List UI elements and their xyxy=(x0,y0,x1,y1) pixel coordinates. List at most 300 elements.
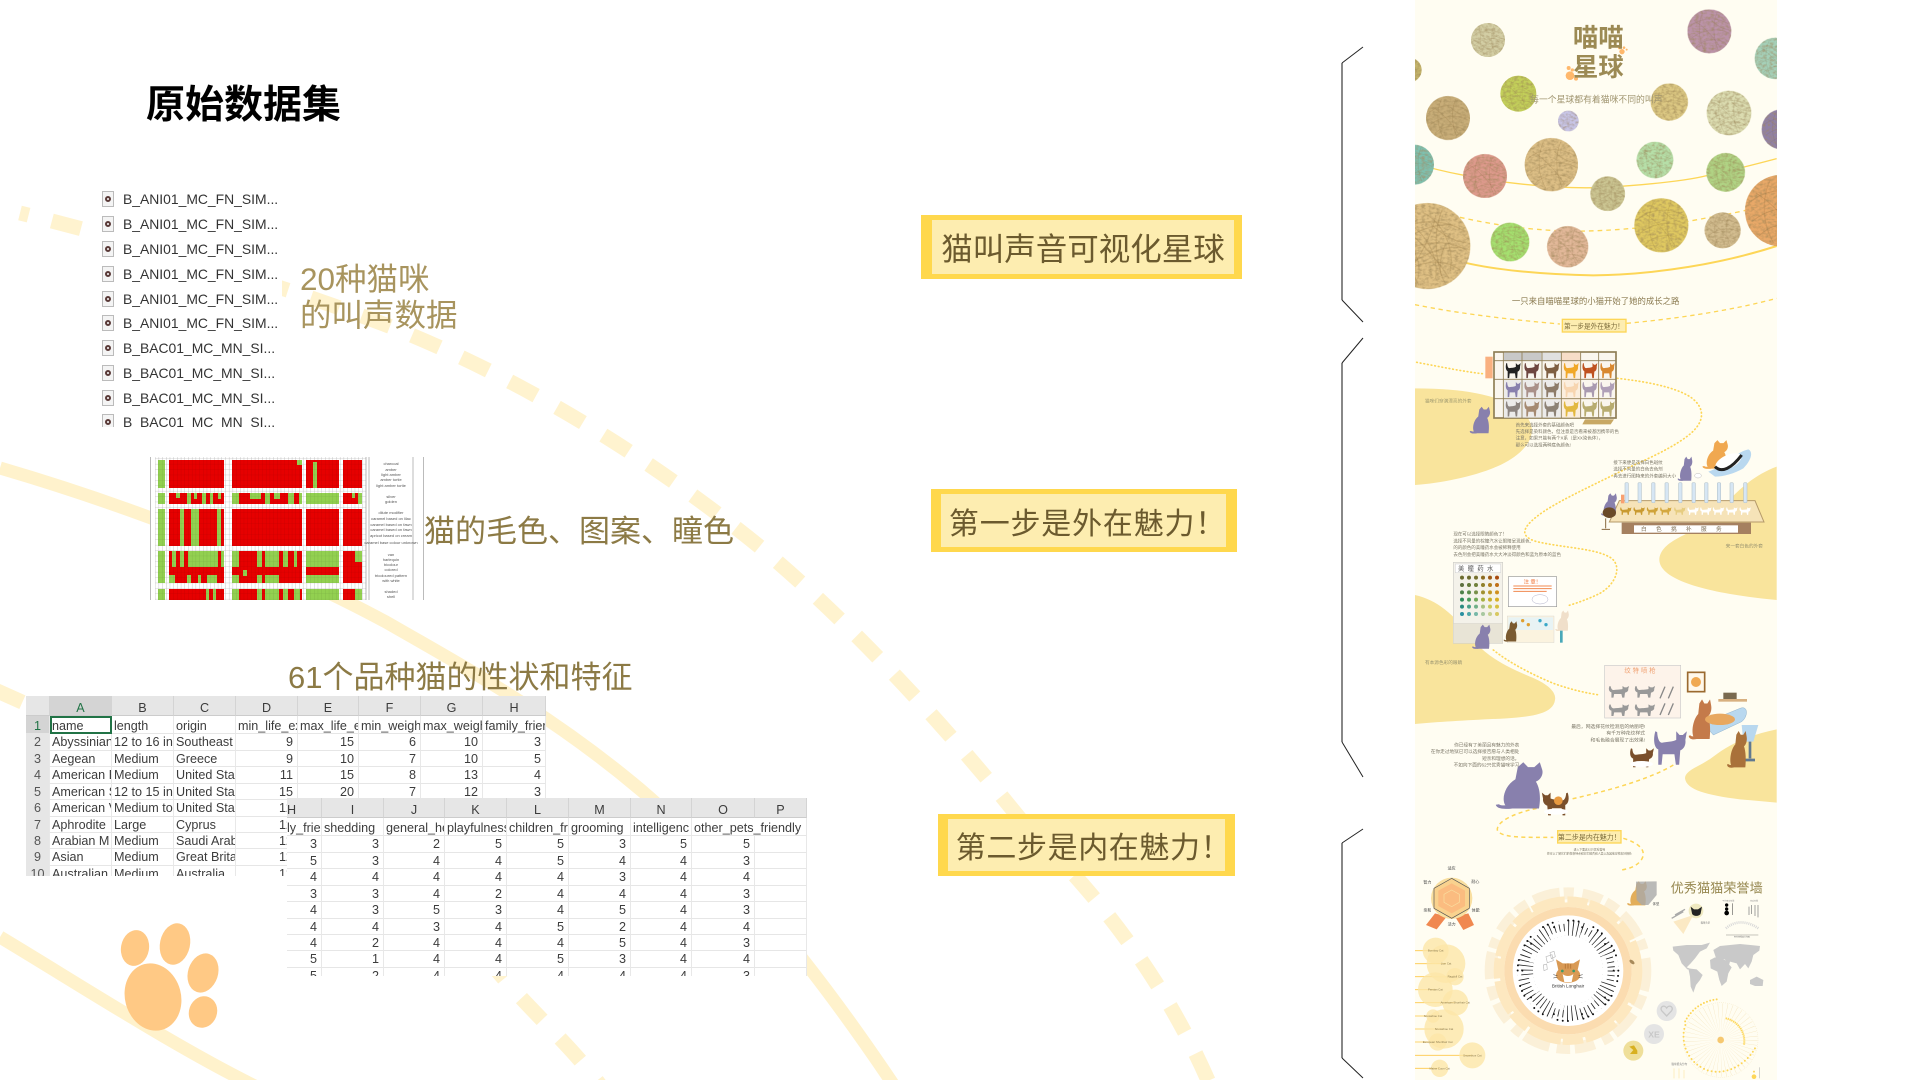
spreadsheet: cat traits columns H to P: 4 xyxy=(680,920,687,934)
heading: 优秀猫猫荣誉墙: 优秀猫猫荣誉墙 xyxy=(1671,880,1763,895)
callout: 第二步是内在魅力: 第二步是内在魅力！ xyxy=(956,832,1231,865)
spreadsheet: cat traits columns H to P: 5 xyxy=(680,837,687,851)
text block: finally choose a pattern: 最后，网选择花纹检测后的纳丽吧! xyxy=(1571,723,1645,730)
callout: 第一步是外在魅力: 第一步是外在魅力！ xyxy=(949,508,1226,540)
spreadsheet: cat traits columns H to P: N xyxy=(656,803,666,817)
callout: 第二步是内在魅力: 第二步是内在魅力！ xyxy=(1558,832,1621,841)
text block: finally choose a pattern: 有千万种花纹样式 xyxy=(1606,730,1645,737)
heatmap: coat colour, pattern and eye colour table: apricot based on cream xyxy=(370,533,413,538)
section: yarn ball planets xyxy=(1384,9,1816,306)
text block: choose base colour: 先选择是染料颜色，但注意是否看来被基因携带的色 xyxy=(1516,428,1619,435)
text block: choose base colour: 首先来选择外套的基础颜色吧 xyxy=(1516,421,1574,428)
chart: radar with ribbon xyxy=(1423,865,1480,930)
spreadsheet: cat traits columns H to P: 4 xyxy=(372,870,379,884)
heatmap: coat colour, pattern and eye colour table: charcoal xyxy=(383,461,399,466)
heatmap: coat colour, pattern and eye colour table: light amber xyxy=(381,472,402,477)
spreadsheet: cat traits columns H to P: 3 xyxy=(619,952,626,966)
spreadsheet: cat traits columns A to H: Medium xyxy=(114,834,159,848)
icon: salon chairs with cats xyxy=(1689,699,1758,768)
yarn ball xyxy=(1745,175,1816,246)
icon: sound wave cards xyxy=(1543,951,1555,971)
text block: choose eye colour: 选择不同量的棕瞳汽水让眼睛呈现颜色, xyxy=(1453,537,1531,544)
spreadsheet: cat traits columns H to P: 5 xyxy=(433,903,440,917)
spreadsheet: cat traits columns A to H xyxy=(26,696,546,876)
spreadsheet: cat traits columns A to H: 12 to 15 in xyxy=(114,785,173,799)
yarn ball xyxy=(1547,226,1588,267)
spreadsheet: cat traits columns A to H: United Sta xyxy=(176,785,235,799)
spreadsheet: cat traits columns H to P: 3 xyxy=(372,837,379,851)
spreadsheet: cat traits columns A to H: 12 xyxy=(279,801,293,815)
spreadsheet: cat traits columns H to P: 4 xyxy=(433,936,440,950)
label: 20种猫咪的叫声数据 xyxy=(300,261,458,333)
spreadsheet: cat traits columns A to H: 15 xyxy=(340,735,354,749)
spreadsheet: cat traits columns H to P: M xyxy=(594,803,605,817)
heatmap: coat colour, pattern and eye colour table: colored xyxy=(384,567,398,572)
heatmap: coat colour, pattern and eye colour table: amber xyxy=(385,467,397,472)
icon: cat size comparison xyxy=(1627,881,1660,906)
spreadsheet: cat traits columns H to P: O xyxy=(718,803,728,817)
heatmap: coat colour, pattern and eye colour table: silver xyxy=(386,494,396,499)
spreadsheet: cat traits columns H to P: 4 xyxy=(433,870,440,884)
spreadsheet: cat traits columns H to P: 4 xyxy=(743,920,750,934)
dashed journey path xyxy=(1497,765,1673,870)
chart: coat colour cat shelf xyxy=(1485,352,1616,424)
spreadsheet: cat traits columns H to P: 4 xyxy=(680,952,687,966)
file list: cat sound recordings xyxy=(102,188,282,427)
chart: radar with ribbon: 体能 xyxy=(1472,906,1480,912)
chart: radar with ribbon: 智力 xyxy=(1423,878,1431,884)
spreadsheet: cat traits columns H to P: intelligenc xyxy=(633,821,689,835)
icon: attention whiteboard xyxy=(1508,577,1557,607)
yarn ball xyxy=(1525,138,1578,191)
chart: test tubes white spotting xyxy=(1609,483,1764,534)
chart: cat head fan xyxy=(1672,904,1711,934)
label: 20种猫咪的叫声数据: 20种猫咪 xyxy=(300,261,430,297)
spreadsheet: cat traits columns H to P: 4 xyxy=(680,854,687,868)
spreadsheet: cat traits columns A to H: Greece xyxy=(176,752,217,766)
spreadsheet: cat traits columns H to P: 5 xyxy=(495,837,502,851)
label: British Longhair: British Longhair xyxy=(1552,984,1585,989)
chart: small bar legend: 猫咪祖先分布 xyxy=(1671,1062,1688,1066)
heatmap: coat colour, pattern and eye colour table: dilute modifier xyxy=(379,510,404,515)
spreadsheet: cat traits columns A to H: A xyxy=(76,701,85,715)
spreadsheet: cat traits columns A to H: C xyxy=(200,701,209,715)
spreadsheet: cat traits columns A to H: 20 xyxy=(340,785,354,799)
chart: breed bubbles: Snowshoe Cat xyxy=(1435,1027,1453,1031)
spreadsheet: cat traits columns A to H: family_frier xyxy=(485,719,546,733)
yarn ball xyxy=(1706,153,1745,192)
text block: small intro: 你可以了解它们的性格特点和它们能否和人类以及其他宠物友好相处 xyxy=(1547,852,1632,856)
text block: choose base colour: 注意，如果只能有两个X系（是XX染色体）， xyxy=(1516,435,1603,442)
heatmap: coat colour, pattern and eye colour table: shell xyxy=(387,594,395,599)
spreadsheet: cat traits columns A to H: 5 xyxy=(534,752,541,766)
yarn ball xyxy=(1397,58,1422,82)
spreadsheet: cat traits columns A to H: 8 xyxy=(34,834,41,848)
spreadsheet: cat traits columns H to P: 3 xyxy=(372,887,379,901)
spreadsheet: cat traits columns H to P: 4 xyxy=(495,952,502,966)
spreadsheet: cat traits columns A to H: 13 xyxy=(464,768,478,782)
spreadsheet: cat traits columns A to H: 6 xyxy=(34,801,41,815)
spreadsheet: cat traits columns H to P: 4 xyxy=(557,936,564,950)
text block: choose eye colour: 去色剂会把美瞳药水大大冲淡得颜色和蓝为原本的蓝色 xyxy=(1453,551,1561,558)
spreadsheet: cat traits columns H to P: 5 xyxy=(310,854,317,868)
spreadsheet: cat traits columns A to H: Southeast xyxy=(176,735,233,749)
icon: trait marker xyxy=(1629,959,1635,965)
spreadsheet: cat traits columns H to P: shedding xyxy=(324,821,375,835)
spreadsheet: cat traits columns H to P: 4 xyxy=(680,936,687,950)
spreadsheet: cat traits columns H to P: 4 xyxy=(619,854,626,868)
icon: sitting grey cat xyxy=(1470,407,1490,434)
spreadsheet: cat traits columns H to P: 3 xyxy=(743,854,750,868)
spreadsheet: cat traits columns H to P: 3 xyxy=(743,887,750,901)
spreadsheet: cat traits columns A to H: origin xyxy=(176,719,207,733)
spreadsheet: cat traits columns A to H: 3 xyxy=(534,735,541,749)
spreadsheet: cat traits columns A to H: Great Brita xyxy=(176,850,236,864)
file list: cat sound recordings: B_ANI01_MC_FN_SIM... xyxy=(123,291,278,307)
spreadsheet: cat traits columns H to P: 4 xyxy=(680,887,687,901)
yarn ball xyxy=(1651,83,1688,121)
spreadsheet: cat traits columns H to P: 2 xyxy=(619,920,626,934)
text block: white gene: 再去进行图特来的外套编码大小 xyxy=(1613,472,1677,479)
heatmap: coat colour, pattern and eye colour table: caramel based on lilac xyxy=(371,516,411,521)
spreadsheet: cat traits columns H to P: 4 xyxy=(619,887,626,901)
spreadsheet: cat traits columns H to P: L xyxy=(534,803,541,817)
file list: cat sound recordings: B_ANI01_MC_FN_SIM... xyxy=(123,191,278,207)
file list: cat sound recordings: B_BAC01_MC_MN_SI... xyxy=(123,365,275,381)
spreadsheet: cat traits columns H to P: P xyxy=(776,803,785,817)
spreadsheet: cat traits columns H to P: other_pets_friendly xyxy=(694,821,801,835)
callout: 第二步是内在魅力 xyxy=(938,814,1235,876)
chart: radar with ribbon: 适应 xyxy=(1448,865,1456,871)
spreadsheet: cat traits columns A to H: 10 xyxy=(464,735,478,749)
file list: cat sound recordings: B_ANI01_MC_FN_SIM... xyxy=(123,315,278,331)
chart: test tubes white spotting: 白色挑补服务 xyxy=(1641,525,1731,533)
bracket: top section xyxy=(1341,46,1364,322)
chart: breed bubbles: Snowshoe Cat xyxy=(1424,1014,1442,1018)
spreadsheet: cat traits columns H to P: 5 xyxy=(310,952,317,966)
spreadsheet: cat traits columns H to P: 4 xyxy=(743,870,750,884)
file list: cat sound recordings: B_ANI01_MC_FN_SIM... xyxy=(123,241,278,257)
spreadsheet: cat traits columns H to P: 2 xyxy=(433,837,440,851)
chart: radial dot chart xyxy=(1683,999,1758,1077)
spreadsheet: cat traits columns A to H: 12 xyxy=(464,785,478,799)
spreadsheet: cat traits columns H to P: 4 xyxy=(433,854,440,868)
heatmap: coat colour, pattern and eye colour table: with white xyxy=(382,578,401,583)
spreadsheet: cat traits columns H to P: 4 xyxy=(310,936,317,950)
spreadsheet: cat traits columns A to H: Abyssinian xyxy=(52,735,112,749)
spreadsheet: cat traits columns H to P: children_fri xyxy=(509,821,569,835)
spreadsheet: cat traits columns H to P: 4 xyxy=(433,952,440,966)
panel: meow planet long infographic xyxy=(1415,0,1777,1080)
chart: breed bubbles: Ragdoll Cat xyxy=(1448,975,1463,979)
chart: radar with ribbon: 耐心 xyxy=(1471,878,1479,884)
yarn ball xyxy=(1687,9,1731,53)
callout: 第一步是外在魅力 xyxy=(931,489,1237,552)
icon: orange paw print xyxy=(120,923,218,1031)
file list: cat sound recordings: B_BAC01_MC_MN_SI... xyxy=(123,390,275,406)
chart: breed bubbles: European Shorthair Cat xyxy=(1423,1040,1453,1044)
spreadsheet: cat traits columns A to H: 7 xyxy=(34,818,41,832)
chart: world map of origins xyxy=(1673,943,1763,993)
chart: small lollipops: 平均寿命范围 xyxy=(1722,898,1734,902)
yellow background blobs xyxy=(1415,388,1777,724)
spreadsheet: cat traits columns A to H: Medium xyxy=(114,768,159,782)
spreadsheet: cat traits columns H to P: 5 xyxy=(557,837,564,851)
spreadsheet: cat traits columns A to H: 15 xyxy=(279,785,293,799)
text block: white gene xyxy=(1613,459,1677,479)
heatmap: coat colour, pattern and eye colour table: bicolour xyxy=(384,562,399,567)
icon: grey cat and kitten sitting xyxy=(1496,762,1569,815)
subtitle: each planet has a different meow: 每一个星球都有着猫咪不同的叫声 xyxy=(1530,93,1663,104)
yarn ball xyxy=(1394,145,1434,185)
spreadsheet: cat traits columns A to H: 2 xyxy=(34,735,41,749)
chart: small bar legend xyxy=(1671,1062,1759,1079)
section: step one external charm xyxy=(1415,298,1777,724)
callout: 猫叫声音可视化星球: 猫叫声音可视化星球 xyxy=(941,231,1225,267)
yarn ball xyxy=(1471,23,1505,57)
title: 原始数据集: 原始数据集 xyxy=(146,84,341,127)
heatmap: coat colour, pattern and eye colour table: amber tortie xyxy=(380,477,402,482)
spreadsheet: cat traits columns H to P: 4 xyxy=(557,903,564,917)
yarn ball xyxy=(1384,203,1470,289)
file list: cat sound recordings: B_BAC01_MC_MN_SI... xyxy=(123,340,275,356)
chart: radar with ribbon: 亲和 xyxy=(1423,906,1431,912)
spreadsheet: cat traits columns A to H: 7 xyxy=(409,752,416,766)
spreadsheet: cat traits columns H to P: I xyxy=(351,803,354,817)
spreadsheet: cat traits columns H to P: 4 xyxy=(310,920,317,934)
spreadsheet: cat traits columns H to P: 4 xyxy=(310,870,317,884)
heatmap: coat colour, pattern and eye colour table: light amber tortie xyxy=(376,483,407,488)
yarn ball xyxy=(1705,212,1741,248)
heading: 喵喵星球: 星球 xyxy=(1573,54,1624,82)
heatmap: coat colour, pattern and eye colour table: harlequin xyxy=(383,557,399,562)
spreadsheet: cat traits columns H to P: 5 xyxy=(619,936,626,950)
spreadsheet: cat traits columns A to H: 12 xyxy=(279,834,293,848)
spreadsheet: cat traits columns H to P: 3 xyxy=(372,903,379,917)
spreadsheet: cat traits columns H to P: 5 xyxy=(743,837,750,851)
yarn ball xyxy=(1707,91,1751,135)
spreadsheet: cat traits columns H to P: 4 xyxy=(372,920,379,934)
heading: 喵喵星球 xyxy=(1573,25,1624,82)
spreadsheet: cat traits columns A to H: Arabian M xyxy=(52,834,109,848)
spreadsheet: cat traits columns A to H: Medium xyxy=(114,850,159,864)
chart: small lollipops xyxy=(1722,898,1758,917)
spreadsheet: cat traits columns A to H: Saudi Arab xyxy=(176,834,236,848)
icon: small paws near title xyxy=(1566,46,1628,81)
icon: grey cat and kitten walking xyxy=(1630,731,1687,767)
section: grooming cats and honor wall xyxy=(1415,699,1777,1079)
spreadsheet: cat traits columns H to P: 3 xyxy=(619,870,626,884)
bracket: middle section xyxy=(1341,338,1364,778)
spreadsheet: cat traits columns A to H: D xyxy=(262,701,271,715)
spreadsheet: cat traits columns A to H: Aegean xyxy=(52,752,95,766)
yarn ball xyxy=(1634,198,1688,252)
icon: muscle trait badge xyxy=(1623,1041,1643,1061)
dotted journey path xyxy=(1417,362,1702,695)
spreadsheet: cat traits columns H to P: 4 xyxy=(680,870,687,884)
spreadsheet: cat traits columns A to H: 7 xyxy=(409,785,416,799)
spreadsheet: cat traits columns A to H: 11 xyxy=(280,768,293,782)
spreadsheet: cat traits columns H to P xyxy=(287,798,807,976)
spreadsheet: cat traits columns H to P: 2 xyxy=(495,887,502,901)
spreadsheet: cat traits columns H to P: 3 xyxy=(310,837,317,851)
spreadsheet: cat traits columns H to P: K xyxy=(471,803,480,817)
yarn ball xyxy=(1491,223,1529,261)
callout: 第一步是外在魅力 xyxy=(1562,319,1626,332)
heatmap: coat colour, pattern and eye colour table: tricoloured pattern xyxy=(375,573,407,578)
callout: 第一步是外在魅力: 第一步是外在魅力！ xyxy=(1564,321,1624,330)
spreadsheet: cat traits columns H to P: 3 xyxy=(372,854,379,868)
spreadsheet: cat traits columns A to H: Medium xyxy=(114,752,159,766)
spreadsheet: cat traits columns H to P: 5 xyxy=(619,903,626,917)
spreadsheet: cat traits columns A to H: 12 xyxy=(279,818,293,832)
text block: choose base colour xyxy=(1516,421,1619,449)
spreadsheet: cat traits columns A to H: 1 xyxy=(34,719,41,733)
text block: finally choose a pattern xyxy=(1571,723,1645,744)
spreadsheet: cat traits columns A to H: 8 xyxy=(409,768,416,782)
spreadsheet: cat traits columns A to H: Cyprus xyxy=(176,818,216,832)
chart: small lollipops: 体重范围 xyxy=(1750,898,1758,902)
spreadsheet: cat traits columns H to P: 4 xyxy=(495,870,502,884)
chart: radar with ribbon: 活力 xyxy=(1448,920,1456,926)
text block: white gene: 选择不同量的白色去色剂 xyxy=(1613,466,1663,473)
spreadsheet: cat traits columns A to H: 9 xyxy=(286,735,293,749)
subtitle: growth journey: 一只来自喵喵星球的小猫开始了她的成长之路 xyxy=(1512,296,1680,306)
file list: cat sound recordings: B_ANI01_MC_FN_SIM... xyxy=(123,266,278,282)
text block: choose eye colour: 现在可以选择眼睛颜色了！ xyxy=(1453,531,1507,538)
text block: inner charm transition: 你已经有了美丽且有魅力的外表 xyxy=(1454,741,1520,748)
icon: orange and black-white cats on lounge xyxy=(1702,440,1751,477)
heatmap: coat colour, pattern and eye colour table: caramel based on fawn xyxy=(370,522,412,527)
spreadsheet: cat traits columns H to P: 3 xyxy=(743,903,750,917)
spreadsheet: cat traits columns H to P: 4 xyxy=(495,920,502,934)
heatmap: coat colour, pattern and eye colour table: shaded xyxy=(384,589,398,594)
text block: inner charm transition: 不如向下面的62只优秀猫咪学习 xyxy=(1454,762,1520,769)
icon: framed cat portrait xyxy=(1688,672,1705,692)
spreadsheet: cat traits columns H to P: 3 xyxy=(495,903,502,917)
spreadsheet: cat traits columns H to P: H xyxy=(287,803,296,817)
dashed journey path top xyxy=(1415,298,1777,324)
chart: cat head fan: 猫咪头型 xyxy=(1701,920,1711,924)
icon: grey cat with bowl xyxy=(1678,457,1701,481)
caption: next white gene: 来一套白色的外套 xyxy=(1726,542,1763,549)
spreadsheet: cat traits columns A to H: 6 xyxy=(409,735,416,749)
text block: inner charm transition xyxy=(1431,741,1520,769)
heatmap: coat colour, pattern and eye colour table: van xyxy=(388,552,394,557)
spreadsheet: cat traits columns H to P: 3 xyxy=(743,936,750,950)
spreadsheet: cat traits columns A to H: min_weigh xyxy=(361,719,421,733)
chart: eye colour potion shelf xyxy=(1453,562,1503,643)
icon: attention whiteboard: 注 意！ xyxy=(1524,577,1541,585)
spreadsheet: cat traits columns A to H: 3 xyxy=(534,785,541,799)
icon: potion counter with cats xyxy=(1472,611,1569,649)
label: 猫的毛色、图案、瞳色: 猫的毛色、图案、瞳色 xyxy=(424,514,734,549)
spreadsheet: cat traits columns H to P: 5 xyxy=(557,952,564,966)
text block: choose eye colour: 的的颜色的美瞳药水会被稀释使用 xyxy=(1453,544,1521,551)
spreadsheet: cat traits columns H to P: 1 xyxy=(372,952,379,966)
chart: breed bubbles: Persian Cat xyxy=(1428,988,1443,992)
yarn ball xyxy=(1762,109,1802,149)
chart: breed bubbles: Lion Cat xyxy=(1441,962,1451,966)
icon: intelligence trait badge xyxy=(1644,1024,1664,1044)
spreadsheet: cat traits columns A to H: 9 xyxy=(286,752,293,766)
caption: choose original eye colour: 有本源色彩的眼睛 xyxy=(1425,659,1463,666)
chart: breed bubbles: Maine Coon Cat xyxy=(1429,1066,1450,1070)
spreadsheet: cat traits columns A to H: Large xyxy=(114,818,146,832)
text block: finally choose a pattern: 和毛色融合展现了出效果! xyxy=(1591,737,1645,744)
spreadsheet: cat traits columns A to H: Medium to xyxy=(114,801,173,815)
heatmap: coat colour, pattern and eye colour table: golden xyxy=(385,499,397,504)
chart: pattern board: 纹特喷枪 xyxy=(1624,666,1658,675)
icon: orange cat face xyxy=(1553,959,1583,983)
spreadsheet: cat traits columns A to H: 12 xyxy=(279,850,293,864)
bracket: bottom section xyxy=(1341,828,1364,1078)
text block: small intro xyxy=(1547,847,1632,856)
text block: white gene: 接下来便是选择白色斑纹 xyxy=(1613,459,1663,466)
heatmap: coat colour, pattern and eye colour table xyxy=(150,457,424,600)
spreadsheet: cat traits columns A to H: United Sta xyxy=(176,768,235,782)
spreadsheet: cat traits columns H to P: 3 xyxy=(433,920,440,934)
spreadsheet: cat traits columns A to H: Asian xyxy=(52,850,84,864)
chart: breed bubbles: Snowshoe Cat xyxy=(1463,1053,1482,1057)
panel background xyxy=(1415,0,1777,1080)
spreadsheet: cat traits columns H to P: 5 xyxy=(557,920,564,934)
spreadsheet: cat traits columns A to H: Aphrodite xyxy=(52,818,106,832)
yarn ball xyxy=(1558,111,1579,131)
spreadsheet: cat traits columns A to H: E xyxy=(324,701,332,715)
yarn ball xyxy=(1500,76,1536,112)
yarn balls xyxy=(1384,9,1816,289)
spreadsheet: cat traits columns A to H: 4 xyxy=(34,768,41,782)
text block: inner charm transition: 短亲和理想的话。 xyxy=(1482,755,1519,762)
spreadsheet: cat traits columns H to P: J xyxy=(411,803,417,817)
callout: 第二步是内在魅力 xyxy=(1558,831,1621,843)
spreadsheet: cat traits columns H to P: 4 xyxy=(310,903,317,917)
spreadsheet: cat traits columns H to P: 2 xyxy=(372,936,379,950)
spreadsheet: cat traits columns A to H: 10 xyxy=(464,752,478,766)
icon: scientist cat at the rack xyxy=(1601,493,1617,529)
spreadsheet: cat traits columns A to H: H xyxy=(509,701,519,715)
spreadsheet: cat traits columns A to H: 15 xyxy=(340,768,354,782)
chart: breed bubbles xyxy=(1415,938,1485,1077)
spreadsheet: cat traits columns A to H: 12 to 16 in xyxy=(114,735,173,749)
spreadsheet: cat traits columns H to P: 4 xyxy=(495,936,502,950)
spreadsheet: cat traits columns H to P: 4 xyxy=(743,952,750,966)
spreadsheet: cat traits columns A to H: 4 xyxy=(534,768,541,782)
spreadsheet: cat traits columns A to H: length xyxy=(114,719,148,733)
chart: circular sound wave xyxy=(1491,893,1645,1048)
chart: breed bubbles: American Shorthair Cat xyxy=(1441,1001,1470,1005)
spreadsheet: cat traits columns H to P: 3 xyxy=(619,837,626,851)
label: 20种猫咪的叫声数据: 的叫声数据 xyxy=(300,297,458,333)
spreadsheet: cat traits columns A to H: F xyxy=(386,701,393,715)
label: 61个品种猫的性状和特征: 61个品种猫的性状和特征 xyxy=(288,660,632,695)
yarn ball xyxy=(1755,38,1796,79)
spreadsheet: cat traits columns A to H: B xyxy=(138,701,147,715)
spreadsheet: cat traits columns H to P: grooming xyxy=(571,821,624,835)
caption: cats wear coats: 猫咪们穿满漂亮的外套 xyxy=(1425,398,1472,405)
text block: choose base colour: 那么可以选择两种底色颜色! xyxy=(1516,442,1571,449)
chart: small area ridge xyxy=(1726,922,1758,938)
yellow background blob xyxy=(1685,729,1777,803)
text block: choose eye colour xyxy=(1453,531,1561,558)
yarn ball xyxy=(1590,176,1625,211)
text block: small intro: 进入下面这62只优秀猫咪 xyxy=(1574,847,1605,851)
spreadsheet: cat traits columns H to P: 5 xyxy=(557,854,564,868)
spreadsheet: cat traits columns A to H: 3 xyxy=(34,752,41,766)
icon: shelf with bottles xyxy=(1718,693,1747,702)
chart: breed bubbles: Bombay Cat xyxy=(1428,949,1444,953)
